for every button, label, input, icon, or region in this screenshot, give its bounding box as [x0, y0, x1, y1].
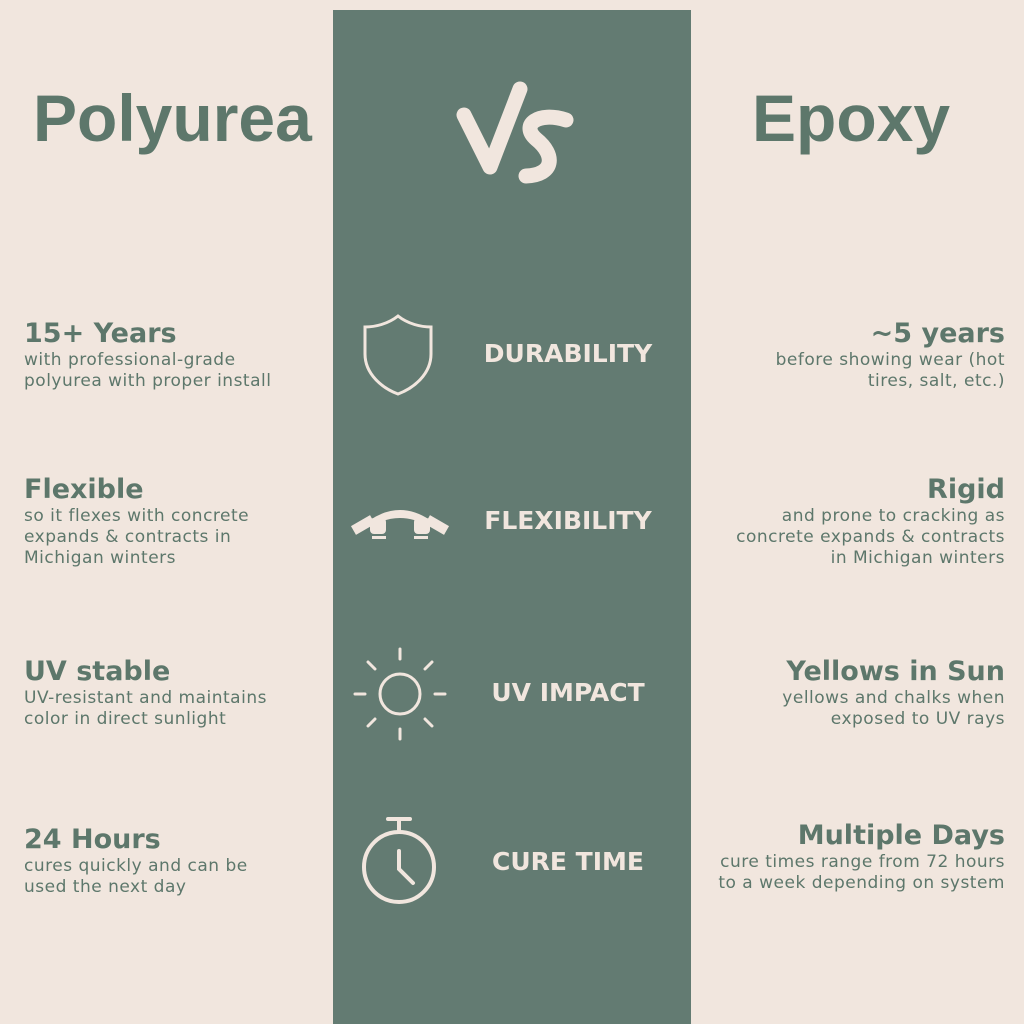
row: uv right: exposed to UV rays	[831, 709, 1005, 729]
row: flexibility left	[24, 474, 249, 568]
label: uv impact: UV IMPACT	[491, 678, 645, 707]
label: flexibility: FLEXIBILITY	[484, 506, 652, 535]
row: uv right: Yellows in Sun	[786, 656, 1005, 687]
row: durability right: ~5 years	[871, 318, 1005, 349]
row: durability left: with professional-grade	[24, 350, 236, 370]
row: durability right: tires, salt, etc.)	[868, 371, 1005, 391]
row: flexibility left: Michigan winters	[24, 548, 176, 568]
row: cure right: cure times range from 72 hours	[720, 852, 1005, 872]
row: cure left: 24 Hours	[24, 824, 161, 855]
label: cure time: CURE TIME	[492, 847, 644, 876]
row: uv left	[24, 656, 267, 729]
row: uv right	[782, 656, 1005, 729]
row: flexibility left: so it flexes with concrete	[24, 506, 249, 526]
row: durability left: 15+ Years	[24, 318, 177, 349]
icon: shield	[364, 314, 432, 396]
row: cure left	[24, 824, 248, 897]
row: cure left: used the next day	[24, 877, 186, 897]
center column	[333, 10, 691, 1024]
row: uv right: yellows and chalks when	[782, 688, 1005, 708]
row: cure right: to a week depending on system	[718, 873, 1005, 893]
row: flexibility right	[736, 474, 1005, 568]
icon: sun	[354, 648, 446, 740]
row: uv left: UV stable	[24, 656, 170, 687]
row: flexibility left: Flexible	[24, 474, 144, 505]
icon: stopwatch	[362, 817, 436, 904]
row: cure left: cures quickly and can be	[24, 856, 248, 876]
row: durability left: polyurea with proper install	[24, 371, 271, 391]
row: uv left: UV-resistant and maintains	[24, 688, 267, 708]
title: Epoxy: Epoxy	[752, 81, 950, 155]
icon: bending	[351, 510, 449, 539]
title: Polyurea: Polyurea	[33, 81, 312, 155]
row: flexibility right: Rigid	[927, 474, 1005, 505]
row: durability left	[24, 318, 271, 391]
row: uv left: color in direct sunlight	[24, 709, 226, 729]
row: durability right	[776, 318, 1005, 391]
row: flexibility right: concrete expands & contracts	[736, 527, 1005, 547]
icon: vs	[456, 82, 574, 184]
row: cure right	[718, 820, 1005, 893]
label: durability: DURABILITY	[484, 339, 652, 368]
row: cure right: Multiple Days	[798, 820, 1005, 851]
row: flexibility right: and prone to cracking as	[782, 506, 1005, 526]
row: flexibility right: in Michigan winters	[831, 548, 1005, 568]
row: flexibility left: expands & contracts in	[24, 527, 231, 547]
row: durability right: before showing wear (hot	[776, 350, 1005, 370]
